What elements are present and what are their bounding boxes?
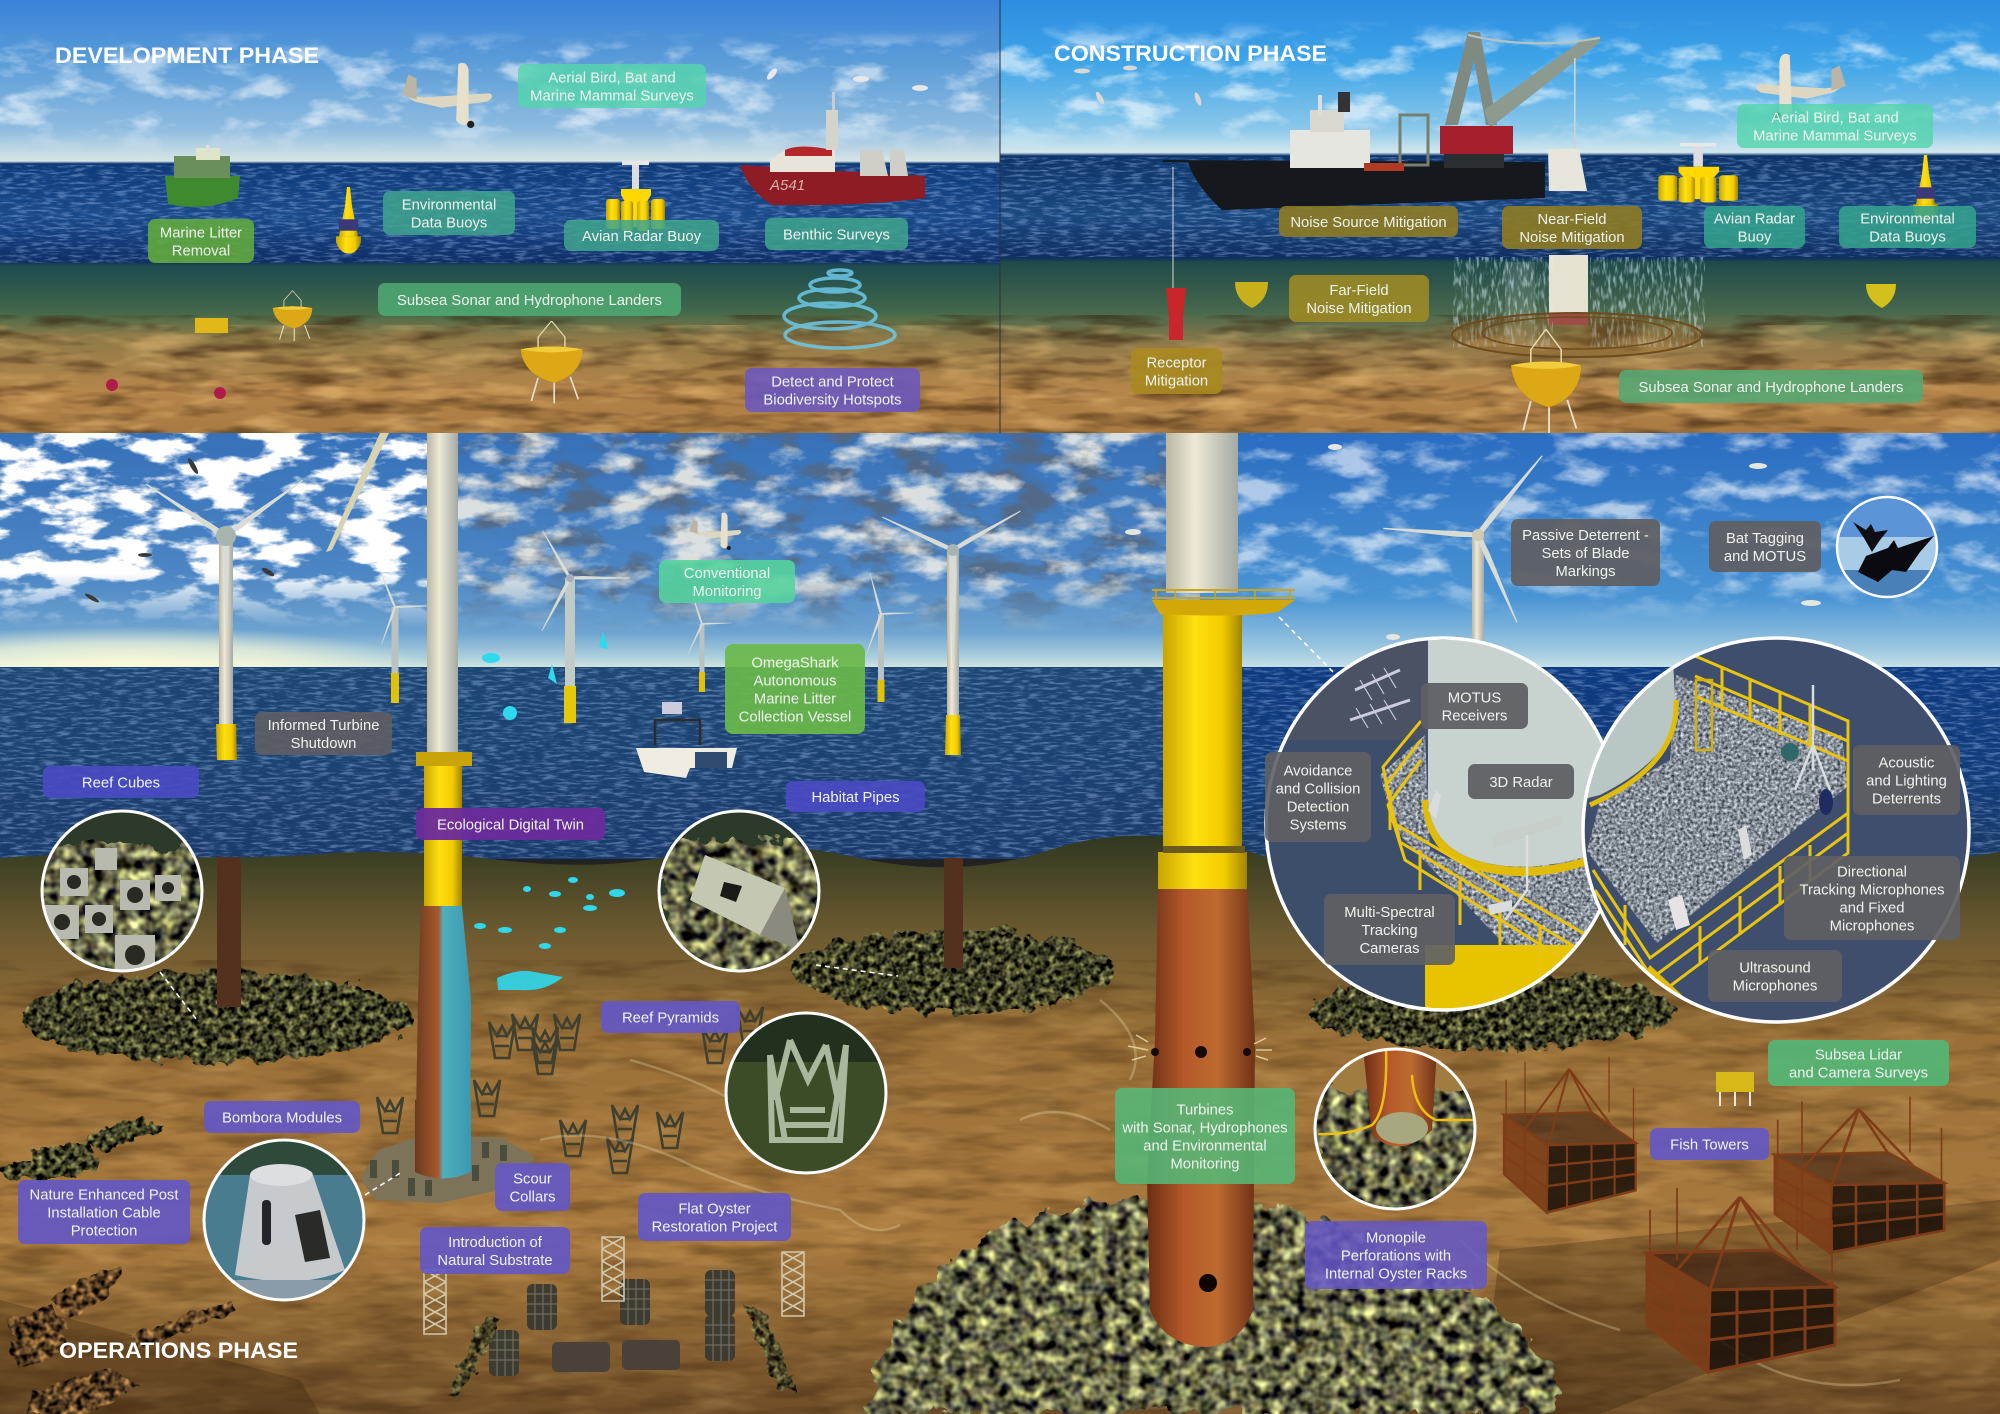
sonar pings xyxy=(1128,1035,1272,1060)
callout: turbine platform right view xyxy=(1580,635,1975,1027)
label: bat tagging: and MOTUS xyxy=(1724,549,1806,565)
turbine 2 xyxy=(379,570,435,703)
label: far-field noise mitigation: Noise Mitigation xyxy=(1306,301,1412,317)
sea waves xyxy=(1000,157,2000,257)
label: receptor mitigation: Receptor xyxy=(1146,356,1207,372)
label: habitat pipes: Habitat Pipes xyxy=(811,790,900,806)
label: avoidance and collision detection: and Collision xyxy=(1276,782,1360,798)
label: flat oyster restoration: Flat Oyster xyxy=(678,1202,751,1218)
label: aerial surveys xyxy=(1737,104,1933,148)
label: biodiversity hotspots xyxy=(745,368,920,412)
sand ripples xyxy=(0,315,1000,433)
fish tower xyxy=(1647,1182,1835,1372)
label: nature enhanced cable protection: Protection xyxy=(71,1224,137,1240)
clouds xyxy=(1000,20,2000,150)
sky birds xyxy=(84,457,275,604)
lidar survey robot xyxy=(1716,1072,1754,1106)
turbine 1 xyxy=(145,478,304,760)
label: noise source mitigation xyxy=(1279,206,1458,237)
label: motus receivers: MOTUS xyxy=(1448,690,1501,706)
label: scour collars xyxy=(495,1163,570,1211)
label: far-field noise mitigation xyxy=(1289,275,1429,322)
avian radar buoy xyxy=(1658,143,1738,202)
label: monopile perforations: Perforations with xyxy=(1341,1248,1451,1264)
installation vessel xyxy=(1163,92,1545,210)
sky, sea and seabed background xyxy=(0,0,1000,433)
marine litter xyxy=(106,379,226,399)
label: subsea sonar landers: Subsea Sonar and Hydrophone Landers xyxy=(397,293,662,309)
label: benthic surveys xyxy=(765,218,908,250)
label: avian radar buoy xyxy=(1704,206,1805,248)
turbine 3 xyxy=(540,530,630,723)
label: ecological digital twin: Ecological Digital Twin xyxy=(437,818,584,834)
label: nature enhanced cable protection: Nature Enhanced Post xyxy=(30,1188,178,1204)
left monopile base xyxy=(415,1100,471,1178)
label: turbine sensors: and Environmental xyxy=(1143,1138,1267,1154)
label: natural substrate xyxy=(420,1227,570,1274)
heading: development phase: DEVELOPMENT PHASE xyxy=(55,43,319,68)
label: subsea lidar: and Camera Surveys xyxy=(1789,1066,1928,1082)
subsea hydrophone lander xyxy=(521,321,582,403)
label: reef cubes xyxy=(43,766,199,798)
receptor mitigation device xyxy=(1166,167,1186,340)
turbine 7 xyxy=(1383,454,1544,640)
label: turbine sensors: with Sonar, Hydrophones xyxy=(1121,1120,1288,1136)
label: conventional monitoring: Monitoring xyxy=(692,584,762,600)
red survey vessel: A541 xyxy=(769,177,805,194)
middle white clouds xyxy=(440,433,1200,633)
right monopile xyxy=(1147,433,1255,1347)
label: avian radar buoy xyxy=(564,220,719,251)
small subsea lander xyxy=(273,291,312,341)
label: directional microphones: Tracking Microphones xyxy=(1799,882,1945,898)
label: acoustic and lighting deterrents: Acoustic xyxy=(1879,756,1935,772)
label: ultrasound microphones: Microphones xyxy=(1733,978,1817,994)
sky, sea and seabed background xyxy=(1000,0,2000,433)
label: avian radar buoy: Buoy xyxy=(1738,230,1772,246)
label: turbine sensors: Monitoring xyxy=(1170,1156,1240,1172)
callout: reef cubes xyxy=(40,810,204,975)
sonar spiral xyxy=(784,270,895,348)
left monopile tower xyxy=(415,433,472,1175)
label: omegashark vessel xyxy=(725,644,865,734)
label: monopile perforations: Monopile xyxy=(1366,1230,1426,1246)
label: avoidance and collision detection: Systems xyxy=(1290,818,1346,834)
label: marine litter removal xyxy=(148,219,254,263)
red survey vessel xyxy=(740,92,925,205)
foundation pile, left xyxy=(217,857,241,1007)
label: nature enhanced cable protection: Installation Cable xyxy=(47,1206,161,1222)
label: biodiversity hotspots: Biodiversity Hotspots xyxy=(763,392,902,408)
label: environmental data buoys xyxy=(383,191,515,235)
left sea xyxy=(0,667,1200,859)
sunset glow xyxy=(0,626,430,710)
oyster gravel xyxy=(445,1305,795,1395)
label: scour collars: Collars xyxy=(509,1190,556,1206)
sand texture xyxy=(0,960,2000,1414)
label: informed turbine shutdown xyxy=(255,712,392,755)
label: monopile perforations: Internal Oyster Racks xyxy=(1325,1266,1467,1282)
label: 3d radar: 3D Radar xyxy=(1489,775,1553,791)
label: bat tagging xyxy=(1709,521,1821,572)
label: motus receivers xyxy=(1421,683,1528,729)
connector lines xyxy=(160,617,1336,1195)
label: subsea lidar xyxy=(1768,1040,1949,1086)
label: conventional monitoring: Conventional xyxy=(684,566,770,582)
rock berm, habitat pipes xyxy=(793,930,1113,1012)
label: multi-spectral cameras: Tracking xyxy=(1361,923,1418,939)
seabed xyxy=(0,835,2000,1414)
heading: construction phase: CONSTRUCTION PHASE xyxy=(1054,41,1327,66)
label: passive deterrent: Passive Deterrent - xyxy=(1522,528,1649,544)
label: near-field noise mitigation: Near-Field xyxy=(1537,212,1607,228)
oyster racks and reef structures xyxy=(424,1237,804,1376)
label: aerial surveys xyxy=(518,64,706,108)
label: bombora modules: Bombora Modules xyxy=(222,1110,342,1126)
label: reef cubes: Reef Cubes xyxy=(82,776,160,792)
environmental data buoy xyxy=(336,187,361,254)
heading: operations phase: OPERATIONS PHASE xyxy=(59,1338,298,1363)
callout: bat tagging xyxy=(1837,497,1937,600)
label: informed turbine shutdown: Shutdown xyxy=(291,736,356,752)
label: flat oyster restoration: Restoration Project xyxy=(652,1220,777,1236)
label: near-field noise mitigation xyxy=(1502,206,1642,249)
plane xyxy=(402,63,492,128)
label: multi-spectral cameras: Cameras xyxy=(1359,941,1420,957)
rock berm, right xyxy=(1310,970,1674,1050)
callout: reef pyramid xyxy=(725,1012,887,1174)
label: omegashark vessel: Autonomous xyxy=(753,674,837,690)
label: ecological digital twin xyxy=(416,808,605,840)
birds xyxy=(1074,66,1203,106)
turbine 6 xyxy=(881,509,1022,755)
label: omegashark vessel: Collection Vessel xyxy=(739,710,851,726)
label: passive deterrent: Markings xyxy=(1555,564,1616,580)
right clouds xyxy=(1200,433,2000,623)
label: motus receivers: Receivers xyxy=(1442,708,1507,724)
label: monopile perforations xyxy=(1305,1221,1487,1289)
label: ultrasound microphones: Ultrasound xyxy=(1739,960,1811,976)
label: acoustic and lighting deterrents: and Lighting xyxy=(1866,774,1947,790)
litter robot xyxy=(195,318,228,333)
bubble curtain xyxy=(1452,257,1705,357)
dark shadow on seabed xyxy=(0,1200,2000,1414)
label: far-field noise mitigation: Far-Field xyxy=(1329,283,1389,299)
label: acoustic and lighting deterrents: Deterrents xyxy=(1872,792,1941,808)
callout: turbine platform left view xyxy=(1264,636,1604,1012)
label: fish towers xyxy=(1650,1128,1769,1160)
label: directional microphones: Microphones xyxy=(1830,918,1914,934)
right sky xyxy=(1200,433,2000,668)
label: environmental data buoys: Environmental xyxy=(402,198,496,214)
label: ultrasound microphones xyxy=(1708,950,1842,1002)
label: avoidance and collision detection: Detection xyxy=(1287,800,1349,816)
label: avian radar buoy: Avian Radar xyxy=(1714,212,1795,228)
label: aerial surveys: Aerial Bird, Bat and xyxy=(548,70,676,86)
cable protection mats xyxy=(0,1118,168,1180)
label: multi-spectral cameras: Multi-Spectral xyxy=(1344,905,1435,921)
callout: bombora module xyxy=(204,1140,366,1305)
label: avian radar buoy: Avian Radar Buoy xyxy=(582,229,702,245)
avian radar buoy xyxy=(606,161,665,231)
label: subsea lidar: Subsea Lidar xyxy=(1815,1048,1902,1064)
omegashark vessel xyxy=(636,702,737,778)
label: acoustic and lighting deterrents xyxy=(1853,745,1960,815)
label: omegashark vessel: OmegaShark xyxy=(751,656,839,672)
sea waves xyxy=(0,165,1000,263)
label: omegashark vessel: Marine Litter xyxy=(754,692,836,708)
label: aerial surveys: Marine Mammal Surveys xyxy=(530,88,694,104)
turbine 5 xyxy=(866,573,913,702)
foundation pile, centre xyxy=(944,858,963,968)
monopile being lowered xyxy=(1548,149,1588,325)
clouds xyxy=(0,30,1000,155)
scour collar xyxy=(360,1137,536,1203)
label: reef pyramids xyxy=(601,1001,740,1033)
survey aircraft xyxy=(689,513,741,550)
label: multi-spectral cameras xyxy=(1324,894,1455,965)
label: avoidance and collision detection: Avoidance xyxy=(1284,764,1352,780)
label: environmental data buoys: Environmental xyxy=(1860,212,1955,228)
passing rotor blade xyxy=(326,433,389,552)
panel: construction phase xyxy=(1000,0,2000,433)
label: environmental data buoys: Data Buoys xyxy=(1869,230,1946,246)
label: conventional monitoring xyxy=(659,560,795,603)
birds xyxy=(765,67,928,91)
label: passive deterrent: Sets of Blade xyxy=(1541,546,1630,562)
rock berm, left xyxy=(20,971,410,1063)
callout: habitat pipes xyxy=(659,810,820,975)
label: directional microphones: and Fixed xyxy=(1840,900,1904,916)
label: nature enhanced cable protection xyxy=(18,1180,190,1244)
label: informed turbine shutdown: Informed Turbine xyxy=(268,718,379,734)
label: subsea sonar landers xyxy=(1619,370,1923,403)
label: habitat pipes xyxy=(786,781,925,812)
label: noise source mitigation: Noise Source Mitigation xyxy=(1290,215,1447,231)
middle grey clouds xyxy=(440,433,1200,633)
subsea landers xyxy=(1235,282,1896,308)
label: subsea sonar landers: Subsea Sonar and Hydrophone Landers xyxy=(1639,380,1903,396)
litter removal ship xyxy=(165,145,240,207)
label: 3d radar xyxy=(1468,764,1574,799)
label: directional microphones: Directional xyxy=(1837,864,1907,880)
panel: development phase xyxy=(0,0,1000,433)
label: subsea sonar landers xyxy=(378,283,681,316)
heavy lift crane xyxy=(1440,32,1600,168)
left sky xyxy=(0,433,1200,668)
subsea hydrophone lander xyxy=(1511,329,1581,433)
label: reef pyramids: Reef Pyramids xyxy=(622,1010,719,1026)
rock outcrops, bottom left xyxy=(5,1268,235,1414)
reef pyramids xyxy=(377,1007,763,1173)
label: passive deterrent xyxy=(1511,519,1660,586)
label: marine litter removal: Removal xyxy=(172,244,230,260)
label: bat tagging: Bat Tagging xyxy=(1726,531,1804,547)
label: natural substrate: Introduction of xyxy=(448,1235,543,1251)
label: receptor mitigation: Mitigation xyxy=(1145,374,1208,390)
label: bombora modules xyxy=(204,1101,360,1133)
caustic light lines xyxy=(540,1000,1900,1385)
label: avoidance and collision detection xyxy=(1265,752,1371,842)
large rock berm xyxy=(867,1199,1556,1414)
label: environmental data buoys xyxy=(1839,206,1976,248)
label: turbine sensors: Turbines xyxy=(1176,1102,1234,1118)
label: aerial surveys: Aerial Bird, Bat and xyxy=(1771,110,1899,126)
label: fish towers: Fish Towers xyxy=(1670,1138,1749,1154)
plane xyxy=(1756,54,1846,119)
label: receptor mitigation xyxy=(1131,348,1222,394)
right sky birds xyxy=(1125,444,1821,640)
label: benthic surveys: Benthic Surveys xyxy=(783,228,890,244)
left white clouds xyxy=(0,433,440,628)
label: marine litter removal: Marine Litter xyxy=(160,226,242,242)
label: directional microphones xyxy=(1784,856,1960,940)
label: environmental data buoys: Data Buoys xyxy=(411,216,487,232)
dolphin xyxy=(497,971,563,990)
divider between development and construction xyxy=(1000,0,1001,433)
label: aerial surveys: Marine Mammal Surveys xyxy=(1753,128,1917,144)
sea waves xyxy=(0,668,2000,858)
right sea xyxy=(1200,667,2000,859)
label: flat oyster restoration xyxy=(638,1193,791,1241)
sand ripples xyxy=(1000,315,2000,433)
turbine access platform xyxy=(1152,590,1295,616)
fish tower xyxy=(1504,1057,1636,1212)
label: natural substrate: Natural Substrate xyxy=(437,1253,553,1269)
swarm of fish and birds xyxy=(474,631,625,949)
turbine 4 xyxy=(687,591,732,692)
label: turbine sensors xyxy=(1115,1088,1295,1184)
callout: monopile perforations xyxy=(1315,1048,1476,1212)
environmental data buoy xyxy=(1913,155,1938,222)
label: scour collars: Scour xyxy=(513,1172,552,1188)
label: near-field noise mitigation: Noise Mitigation xyxy=(1519,230,1625,246)
label: biodiversity hotspots: Detect and Protect xyxy=(771,374,894,390)
panel: operations phase xyxy=(0,433,2000,1414)
fish tower xyxy=(1775,1097,1944,1252)
